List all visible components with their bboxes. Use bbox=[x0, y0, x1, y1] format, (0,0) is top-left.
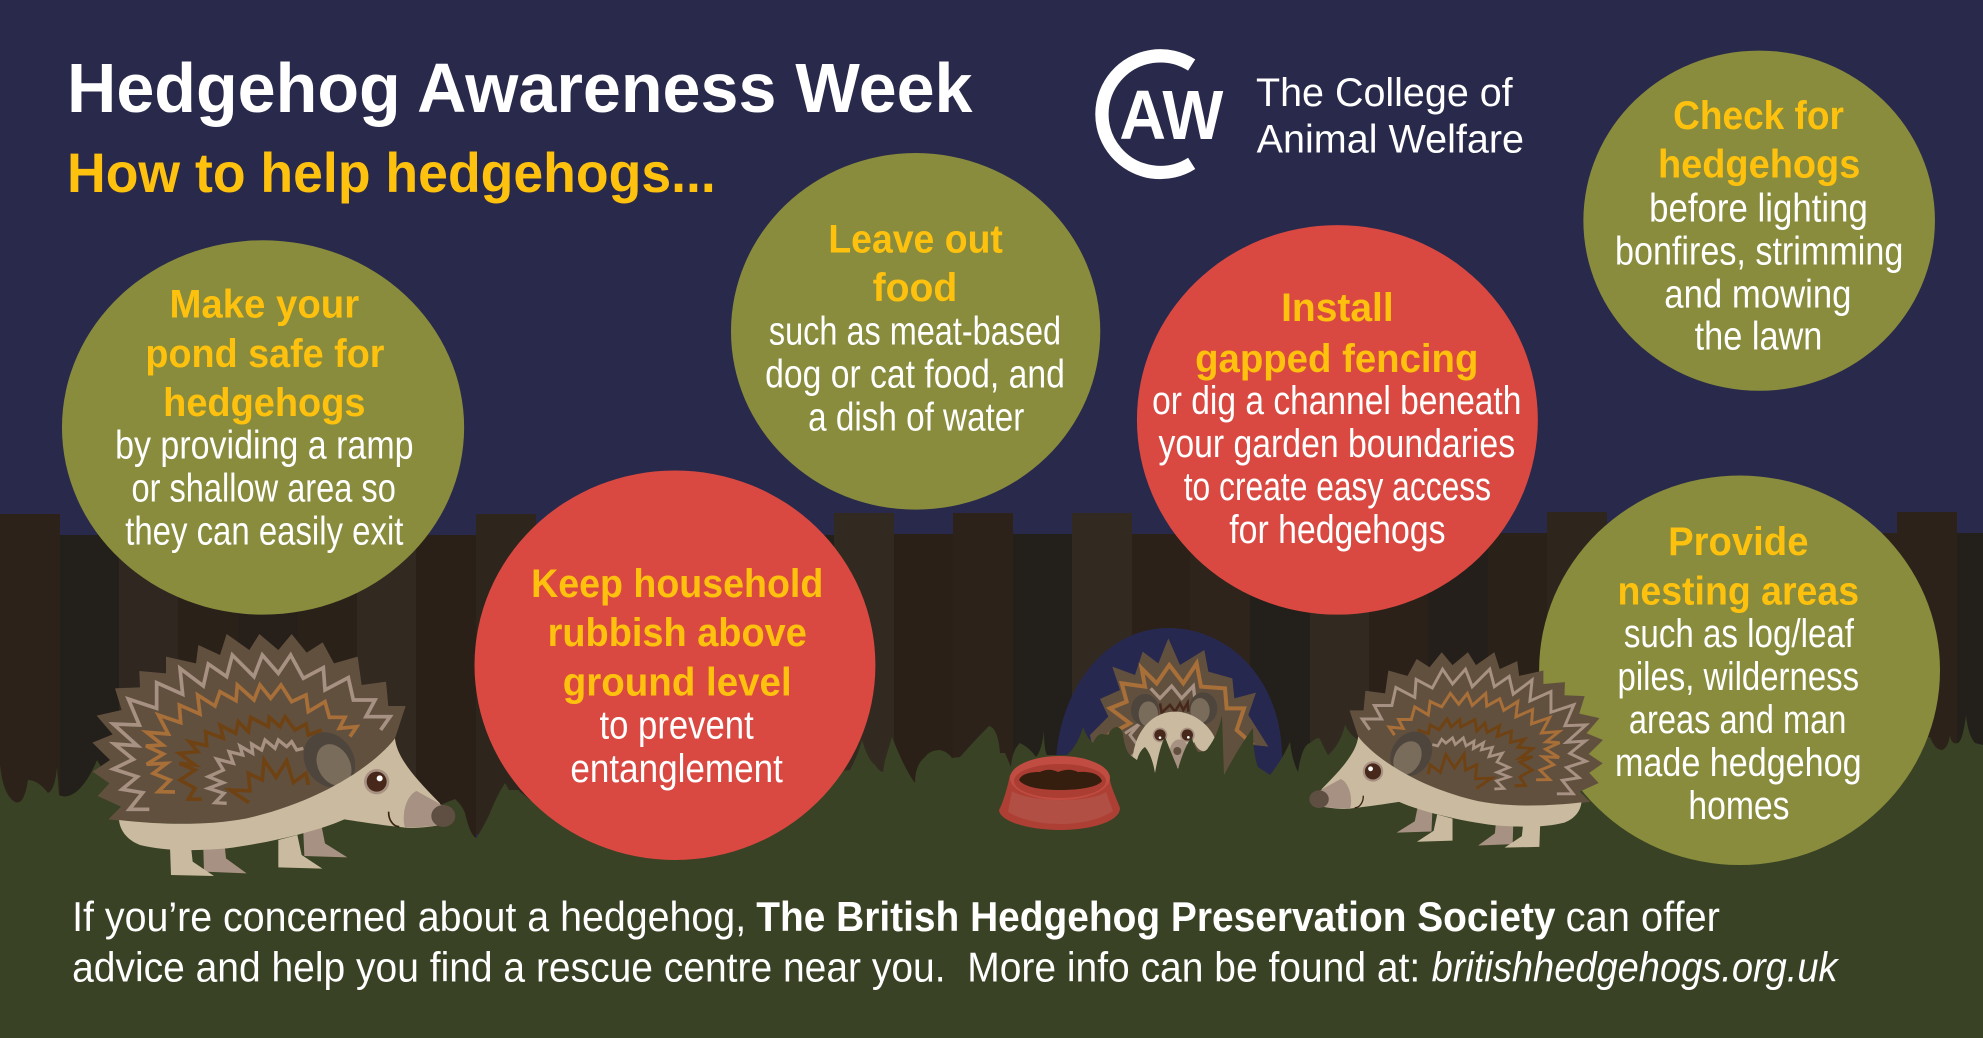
heading: check: hedgehogs bbox=[1658, 143, 1860, 187]
icon: CAW mark bbox=[1102, 56, 1224, 172]
text: nesting: such as log/leaf bbox=[1624, 612, 1855, 656]
logo: College of Animal Welfare bbox=[1102, 56, 1524, 172]
hedgehog facing right bbox=[92, 634, 455, 876]
heading: nesting: nesting areas bbox=[1618, 570, 1859, 614]
heading: nesting: Provide bbox=[1668, 520, 1808, 564]
heading: rubbish bbox=[531, 562, 823, 705]
text: fencing: your garden boundaries bbox=[1158, 422, 1515, 466]
heading: food bbox=[828, 217, 1003, 310]
text: check bbox=[1615, 186, 1903, 359]
text: college name bbox=[1256, 71, 1524, 162]
footer text: can offer bbox=[1566, 893, 1720, 940]
subtitle: How to help hedgehogs... bbox=[67, 142, 716, 204]
food bowl bbox=[999, 756, 1120, 830]
heading: pond safety bbox=[145, 282, 384, 425]
text: pond safety: they can easily exit bbox=[125, 509, 403, 553]
text: college name: The College of bbox=[1256, 71, 1514, 115]
peeking hedgehog bbox=[1090, 638, 1268, 787]
text: rubbish bbox=[570, 704, 783, 791]
text: fencing: for hedgehogs bbox=[1229, 508, 1446, 552]
text: check: before lighting bbox=[1649, 186, 1868, 230]
text: check: and mowing bbox=[1664, 272, 1851, 316]
text: college name: Animal Welfare bbox=[1257, 118, 1524, 162]
text: nesting: piles, wilderness bbox=[1618, 655, 1859, 699]
panel: gapped fencing bbox=[1137, 225, 1538, 615]
text: nesting: homes bbox=[1688, 784, 1790, 828]
hedgehog facing left bbox=[1309, 652, 1603, 848]
heading: food: Leave out bbox=[828, 217, 1003, 261]
heading: rubbish: rubbish above bbox=[548, 611, 807, 655]
heading: fencing: gapped fencing bbox=[1195, 337, 1478, 381]
footer text: The British Hedgehog Preservation Society bbox=[756, 893, 1556, 940]
heading: pond safety: hedgehogs bbox=[163, 381, 365, 425]
text: rubbish: to prevent bbox=[599, 704, 754, 748]
footer text: britishhedgehogs.org.uk bbox=[1432, 943, 1840, 990]
heading: nesting bbox=[1618, 520, 1859, 614]
text: fencing bbox=[1152, 379, 1521, 552]
heading: fencing bbox=[1195, 286, 1478, 381]
heading: pond safety: Make your bbox=[169, 282, 359, 326]
panel: nesting areas bbox=[1539, 476, 1940, 865]
heading: check bbox=[1658, 94, 1860, 187]
text: pond safety: or shallow area so bbox=[132, 466, 396, 510]
heading: food: food bbox=[873, 266, 957, 310]
footer text bbox=[72, 893, 1840, 990]
text: fencing: to create easy access bbox=[1184, 465, 1491, 509]
text: food: such as meat-based bbox=[769, 310, 1061, 354]
text: rubbish: entanglement bbox=[570, 747, 783, 791]
night sky dome behind the hedgehog hole bbox=[1056, 628, 1282, 790]
heading: check: Check for bbox=[1673, 94, 1844, 138]
text: pond safety: by providing a ramp bbox=[115, 423, 414, 467]
panel: leave out food bbox=[731, 153, 1100, 510]
heading: pond safety: pond safe for bbox=[145, 332, 384, 376]
text: food: dog or cat food, and bbox=[765, 353, 1065, 397]
footer text: If you’re concerned about a hedgehog, bbox=[72, 893, 746, 940]
text: food bbox=[765, 310, 1065, 440]
text: nesting bbox=[1615, 612, 1862, 828]
panel: rubbish bbox=[475, 470, 875, 860]
heading: rubbish: Keep household bbox=[531, 562, 823, 606]
text: check: the lawn bbox=[1695, 315, 1822, 359]
text: fencing: or dig a channel beneath bbox=[1152, 379, 1521, 423]
footer text: advice and help you find a rescue centre near you. More info can be found at: bbox=[72, 943, 1420, 990]
wooden fence bbox=[0, 512, 1983, 845]
panel: pond safety bbox=[62, 240, 464, 615]
icon: CAW mark: AW bbox=[1119, 76, 1224, 154]
panel: check for hedgehogs bbox=[1583, 51, 1935, 391]
title: Hedgehog Awareness Week bbox=[67, 49, 973, 127]
text: check: bonfires, strimming bbox=[1615, 229, 1903, 273]
grass ground bbox=[0, 715, 1983, 1038]
heading: fencing: Install bbox=[1281, 286, 1394, 330]
text: pond safety bbox=[115, 423, 414, 553]
heading: rubbish: ground level bbox=[563, 661, 792, 705]
text: nesting: made hedgehog bbox=[1615, 741, 1862, 785]
text: food: a dish of water bbox=[808, 396, 1024, 440]
text: nesting: areas and man bbox=[1629, 698, 1846, 742]
